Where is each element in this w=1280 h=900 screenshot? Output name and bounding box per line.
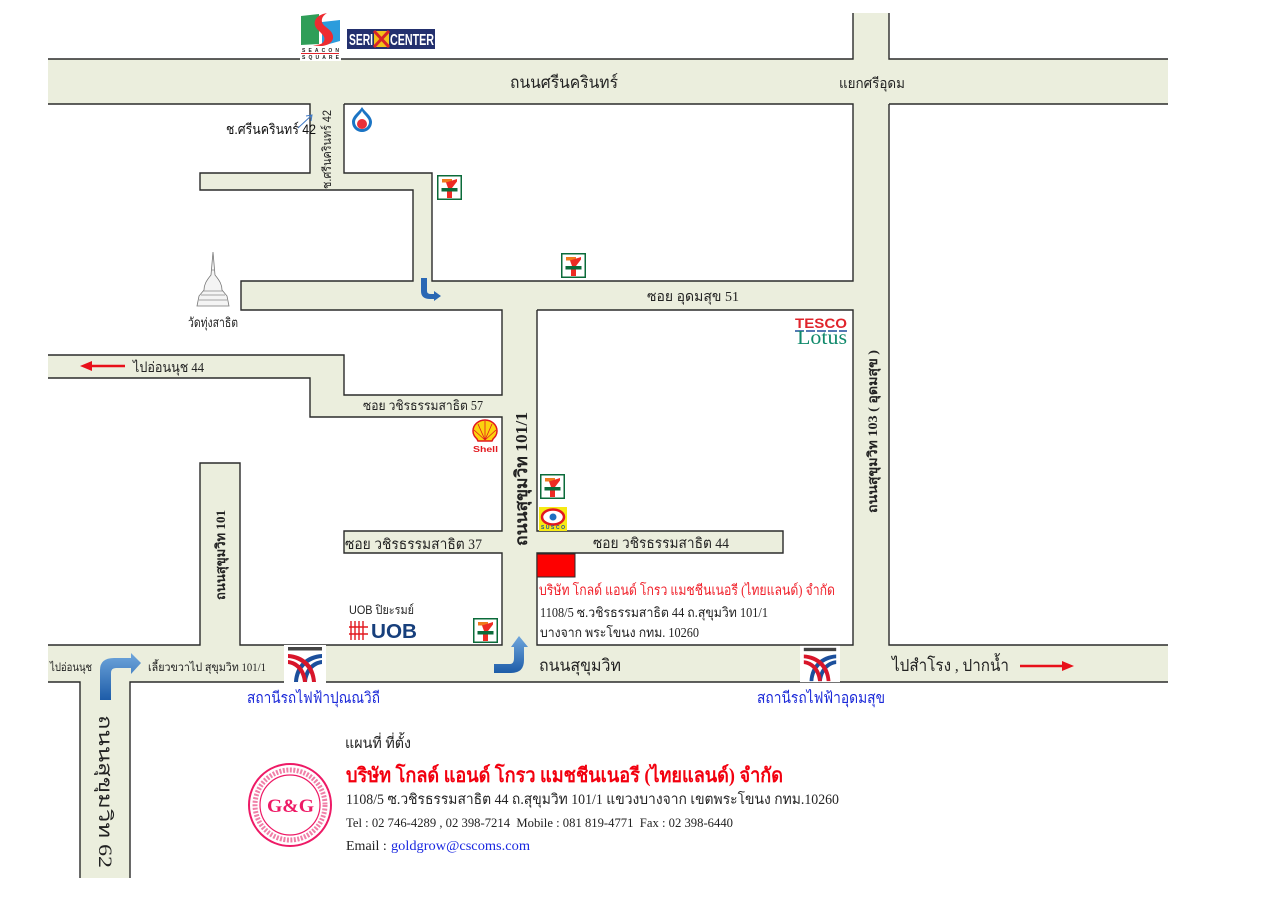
icon: PTT station (352, 107, 372, 132)
icon: small turn arrow (421, 278, 441, 301)
icon: 7-Eleven (540, 474, 565, 499)
logo: UOB (349, 621, 417, 643)
footer email: goldgrow@cscoms.com (391, 839, 530, 854)
company stamp: G&G (267, 796, 314, 817)
road label: Soi Udomsuk 51: ซอย อุดมสุข 51 (647, 290, 739, 305)
address on map: บางจาก พระโขนง กทม. 10260 (540, 624, 699, 640)
road label: Soi Vachira 44: ซอย วชิรธรรมสาธิต 44 (593, 536, 730, 552)
icon: 7-Eleven (473, 618, 498, 643)
logo: Seri Center (347, 29, 435, 49)
label: temple name: วัดทุ่งสาธิต (188, 315, 238, 331)
label: turn right to Sukhumvit 101/1: เลี้ยวขวาไป สุขุมวิท 101/1 (148, 659, 266, 674)
station label: Punnawithi: สถานีรถไฟฟ้าปุณณวิถี (247, 689, 380, 708)
address on map: 1108/5 ซ.วชิรธรรมสาธิต 44 ถ.สุขุมวิท 101/1 (540, 605, 768, 621)
address on map (540, 605, 768, 640)
logo: Tesco Lotus (795, 315, 847, 349)
footer phone numbers: Tel : 02 746-4289 , 02 398-7214 Mobile : 081 819-4771 Fax : 02 398-6440 (346, 816, 733, 830)
UOB branch label: UOB ปิยะรมย์ (349, 603, 414, 617)
road label: Soi Vachira 37: ซอย วชิรธรรมสาธิต 37 (345, 537, 482, 553)
arrow and label: to Samrong: ไปสำโรง , ปากน้ำ (890, 653, 1009, 675)
icon: large blue turn arrow (100, 653, 141, 700)
road label: Si Udom junction: แยกศรีอุดม (839, 76, 905, 92)
road label: Soi Vachira 57: ซอย วชิรธรรมสาธิต 57 (363, 398, 483, 413)
station label: Udom Suk: สถานีรถไฟฟ้าอุดมสุข (757, 689, 885, 708)
logo: Seri Center: SERI (349, 32, 373, 49)
logo: Tesco Lotus: TESCO (795, 315, 847, 331)
icon: blue turn arrow (494, 636, 528, 673)
arrow and label: to Samrong (890, 653, 1074, 675)
icon: BTS Udom Suk (800, 646, 840, 682)
icon: 7-Eleven (561, 253, 586, 278)
company name on map: บริษัท โกลด์ แอนด์ โกรว แมชชีนเนอรี (ไทยแลนด์) จำกัด (539, 581, 835, 599)
icon: 7-Eleven (437, 175, 462, 200)
footer heading: แผนที่ ที่ตั้ง (345, 732, 411, 752)
icon: BTS Punnawithi (284, 645, 326, 683)
road label: Sukhumvit: ถนนสุขุมวิท (539, 656, 621, 676)
logo: Seacon Square: SQUARE (302, 55, 340, 61)
road label: Sukhumvit 62: ถนนสุขุมวิท 62 (93, 715, 115, 868)
road label: to On Nut: ไปอ่อนนุช (49, 661, 92, 674)
icon: Shell: Shell (473, 444, 498, 454)
company location marker (537, 554, 575, 577)
company stamp (249, 764, 331, 846)
label: Soi Srinakarin 42 with pointer: ช.ศรีนครินทร์ 42 (226, 121, 316, 137)
icon: Shell (473, 420, 498, 454)
logo: Seacon Square: SEACON (302, 48, 339, 54)
road label: Srinakarin: ถนนศรีนครินทร์ (510, 73, 618, 92)
road label: Sukhumvit 101: ถนนสุขุมวิท 101 (213, 510, 229, 600)
road label: Sukhumvit 101/1: ถนนสุขุมวิท 101/1 (512, 412, 532, 546)
road label: Sukhumvit 103: ถนนสุขุมวิท 103 ( อุดมสุข ) (865, 350, 881, 513)
footer email: Email : (346, 839, 387, 854)
road label: vertical Soi Srinakarin 42: ช.ศรีนครินทร์ 42 (320, 110, 334, 189)
footer address: 1108/5 ซ.วชิรธรรมสาธิต 44 ถ.สุขุมวิท 101/1 แขวงบางจาก เขตพระโขนง กทม.10260 (346, 790, 839, 808)
logo: Tesco Lotus: Lotus (797, 327, 847, 349)
arrow and label: to On Nut 44 (80, 359, 204, 376)
logo: UOB: UOB (371, 621, 417, 643)
arrow and label: to On Nut 44: ไปอ่อนนุช 44 (132, 359, 204, 376)
icon: temple pagoda (197, 252, 229, 306)
logo: Seacon Square (300, 13, 341, 61)
icon: Susco: SUSCO (541, 525, 565, 531)
icon: Susco (539, 507, 567, 531)
logo: Seri Center: CENTER (390, 32, 434, 49)
footer company name: บริษัท โกลด์ แอนด์ โกรว แมชชีนเนอรี (ไทยแลนด์) จำกัด (346, 763, 783, 787)
label: Soi Srinakarin 42 with pointer (226, 115, 316, 137)
